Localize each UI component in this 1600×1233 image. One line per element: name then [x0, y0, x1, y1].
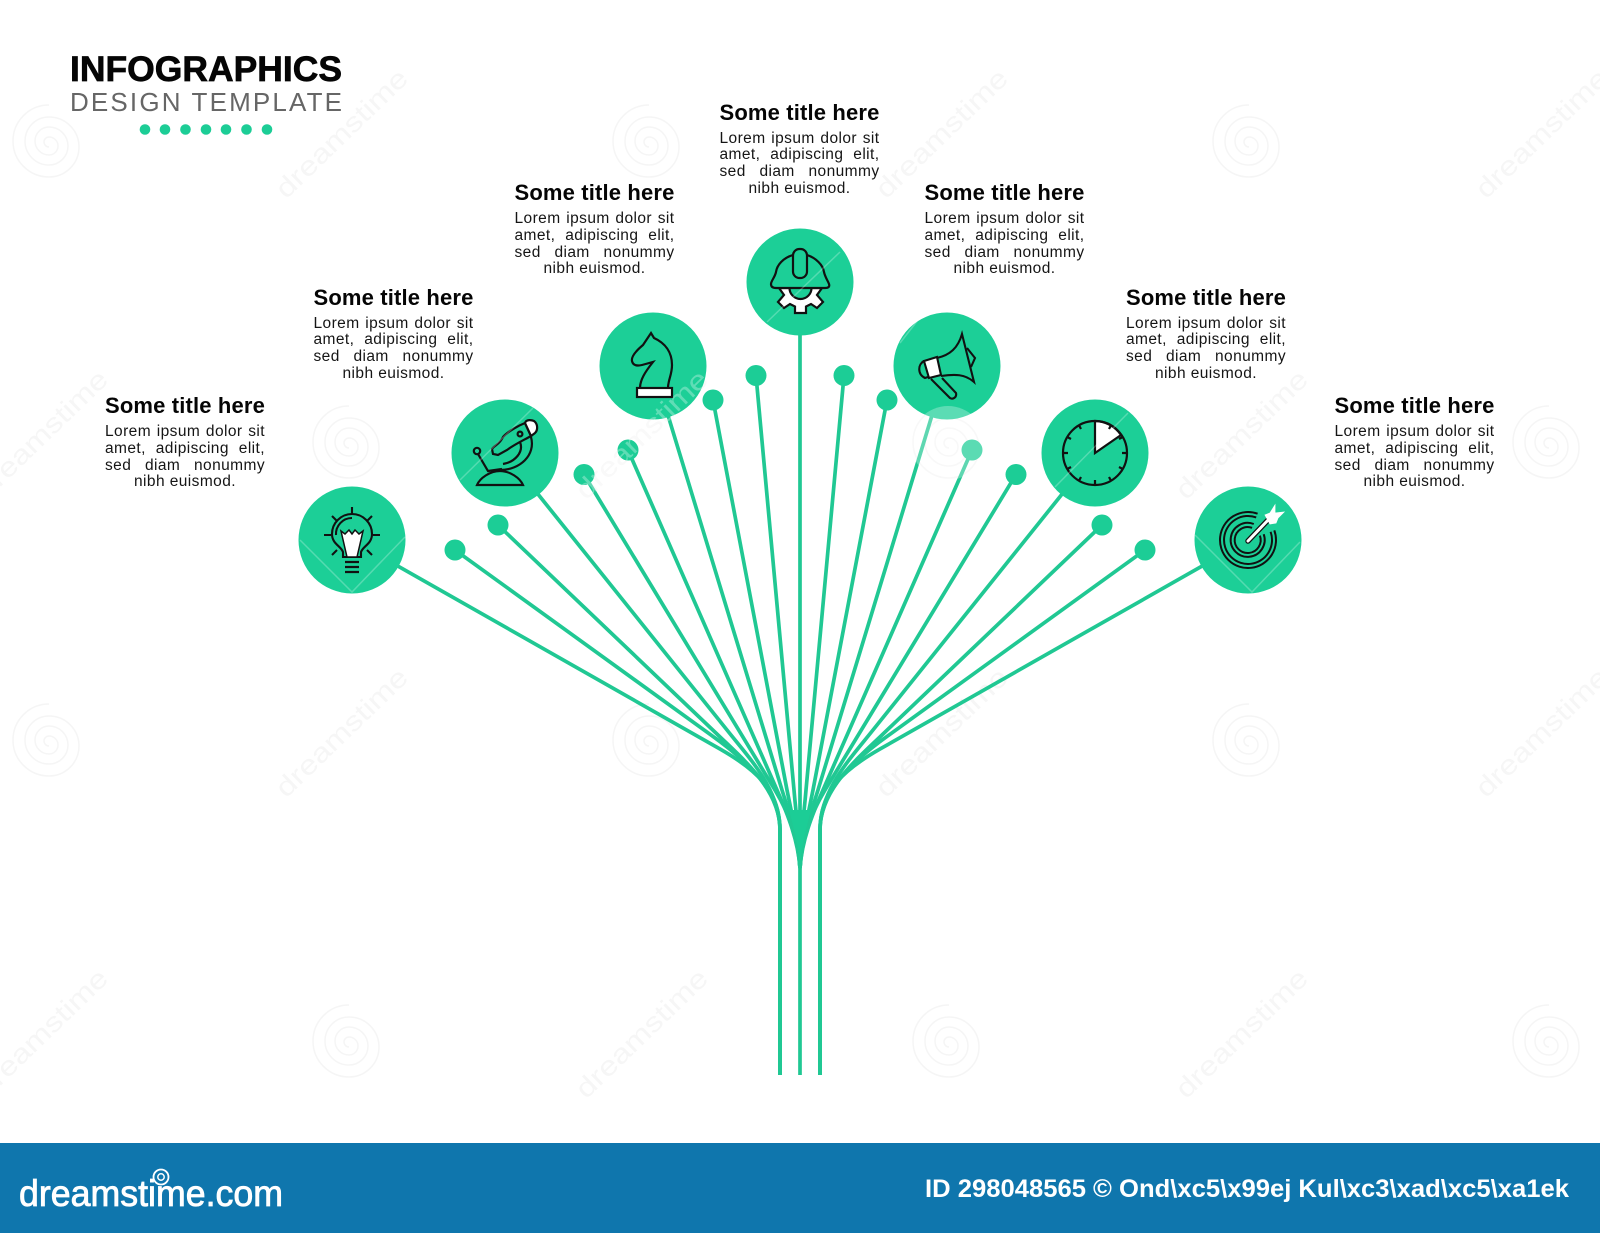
text block 4: Some title here — [720, 100, 879, 124]
footer bar — [0, 1143, 1600, 1233]
icon: megaphone — [919, 334, 975, 399]
text block 6: Lorem ipsum dolor sit — [1126, 315, 1286, 332]
text block 1: nibh euismod. — [134, 473, 236, 490]
title dots — [140, 124, 272, 135]
text: dreamstime — [1169, 364, 1314, 505]
text block 6: Some title here — [1126, 285, 1286, 310]
text block 3: Lorem ipsum dolor sit — [514, 210, 674, 227]
title — [70, 50, 342, 117]
text block 5 — [924, 180, 1084, 277]
text block 4: Lorem ipsum dolor sit — [720, 130, 880, 146]
icon: target and dart — [1220, 505, 1284, 568]
left branch lines — [352, 366, 800, 1075]
text block 4: amet, adipiscing elit, — [720, 146, 880, 163]
text: dreamstime — [569, 364, 714, 505]
text block 2: Some title here — [314, 285, 473, 310]
text: dreamstime — [1469, 662, 1600, 803]
title: DESIGN TEMPLATE — [70, 87, 342, 117]
text block 7: Lorem ipsum dolor sit — [1334, 423, 1494, 440]
branch end dots — [444, 365, 1156, 560]
text block 7: amet, adipiscing elit, — [1334, 440, 1494, 457]
text block 1: sed diam nonummy — [105, 457, 265, 474]
icon: clock — [1063, 421, 1127, 485]
text block 3 — [514, 180, 674, 277]
text block 3: nibh euismod. — [544, 260, 645, 277]
text block 2: nibh euismod. — [343, 365, 444, 382]
node: target — [1194, 486, 1302, 594]
text: dreamstime — [869, 662, 1014, 803]
centre cusp — [789, 810, 811, 872]
text block 5: amet, adipiscing elit, — [924, 227, 1084, 244]
text block 2: Lorem ipsum dolor sit — [314, 315, 474, 332]
text block 6: amet, adipiscing elit, — [1126, 331, 1286, 348]
text: dreamstime — [569, 963, 714, 1104]
text block 7 — [1334, 393, 1494, 490]
text block 7: sed diam nonummy — [1334, 457, 1494, 474]
icon: microscope — [474, 420, 537, 485]
text: dreamstime — [269, 63, 414, 204]
text block 4: nibh euismod. — [749, 180, 850, 197]
title: INFOGRAPHICS — [70, 50, 342, 89]
text block 3: Some title here — [514, 180, 674, 205]
text block 2: sed diam nonummy — [314, 348, 474, 365]
node: megaphone — [894, 312, 1000, 420]
fan of lines and trunks — [352, 282, 1248, 1075]
icon: chess knight — [632, 333, 672, 397]
text block 5: nibh euismod. — [954, 260, 1055, 277]
text block 6: nibh euismod. — [1155, 365, 1257, 382]
icon: helmet and gear — [771, 249, 829, 313]
text block 1 — [105, 393, 265, 490]
text: dreamstime — [569, 364, 714, 505]
centre trunk line — [798, 282, 802, 1075]
text block 7: nibh euismod. — [1364, 473, 1465, 490]
text block 1: Lorem ipsum dolor sit — [105, 423, 265, 440]
text: dreamstime — [269, 662, 414, 803]
text block 6 — [1126, 285, 1286, 382]
right branch lines — [800, 366, 1248, 1075]
footer logo: dreamstime.com — [19, 1173, 283, 1214]
text block 2 — [314, 285, 474, 382]
text block 7: Some title here — [1334, 393, 1494, 418]
text block 3: amet, adipiscing elit, — [514, 227, 674, 244]
text: dreamstime — [869, 63, 1014, 204]
text block 4: sed diam nonummy — [720, 163, 880, 180]
node: lightbulb — [298, 486, 406, 594]
text block 1: amet, adipiscing elit, — [105, 440, 265, 457]
text block 4 — [720, 100, 880, 197]
node: microscope — [452, 400, 558, 506]
icon: lightbulb — [324, 507, 380, 572]
text: dreamstime — [1469, 63, 1600, 204]
text: dreamstime — [1169, 963, 1314, 1104]
node: clock — [1042, 400, 1148, 506]
text block 2: amet, adipiscing elit, — [314, 331, 474, 348]
text block 3: sed diam nonummy — [514, 244, 674, 261]
text block 5: sed diam nonummy — [924, 244, 1084, 261]
text block 1: Some title here — [105, 393, 265, 418]
text block 6: sed diam nonummy — [1126, 348, 1286, 365]
text block 5: Lorem ipsum dolor sit — [924, 210, 1084, 227]
node: helmet and gear — [746, 228, 854, 336]
node: chess knight — [600, 312, 706, 420]
text block 5: Some title here — [924, 180, 1084, 205]
footer credit: ID 298048565 © Ond\xc5\x99ej Kul\xc3\xad\xc5\xa1ek — [925, 1175, 1569, 1203]
